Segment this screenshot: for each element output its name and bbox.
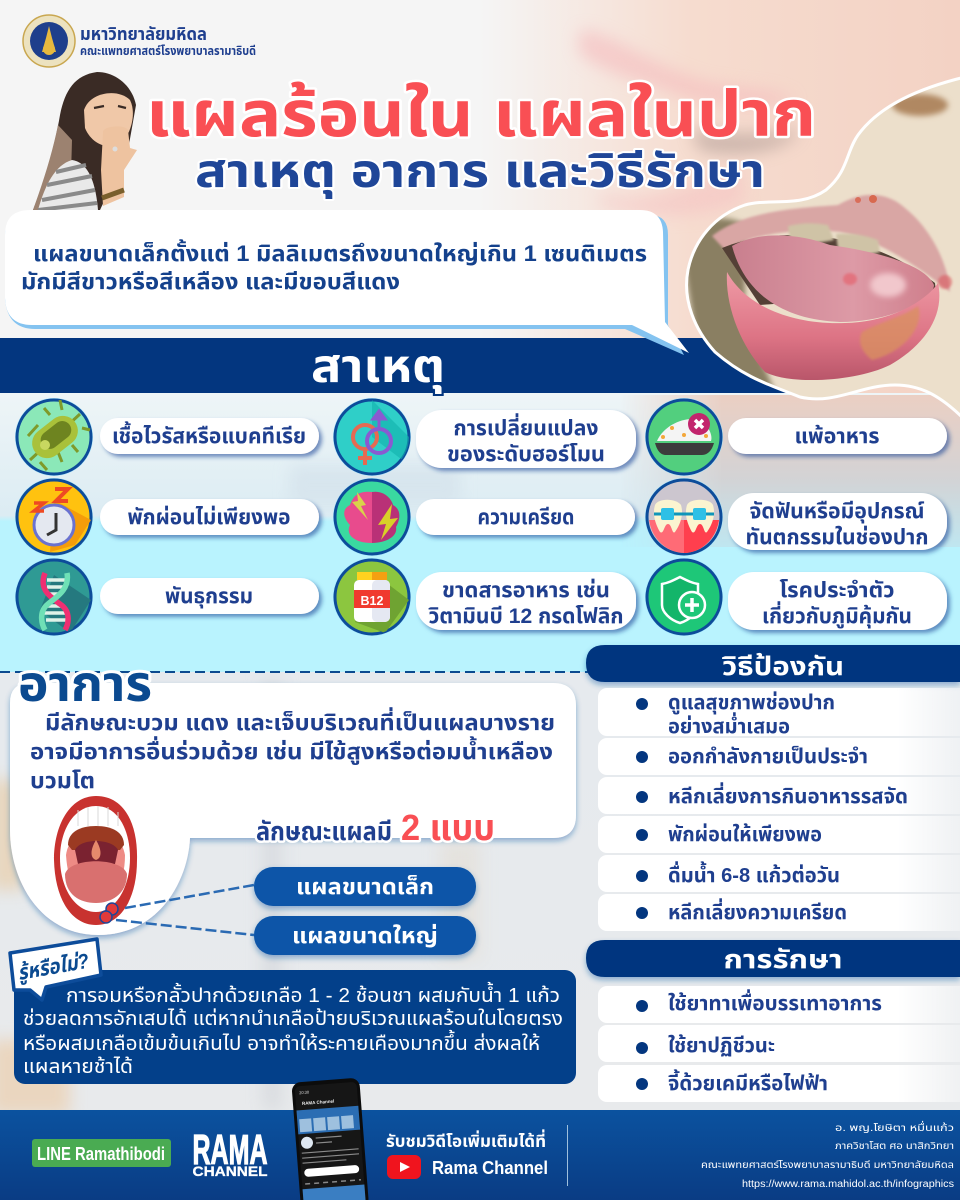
panel: symptoms bubble: อาจมีอาการอื่นร่วมด้วย เช่น มีไข้สูงหรือต่อมน้ำเหลือง	[30, 736, 553, 765]
pill	[728, 493, 947, 550]
badge: did you know label	[10, 939, 101, 1000]
item: exercise: ออกกำลังกายเป็นประจำ	[668, 745, 868, 768]
logo: RAMA Channel	[192, 1126, 268, 1179]
button: LINE Ramathibodi: LINE Ramathibodi	[37, 1144, 165, 1164]
pill: ของระดับฮอร์โมน	[447, 443, 605, 466]
item: antibiotics: ใช้ยาปฏิชีวนะ	[668, 1035, 775, 1057]
heading: treatment	[586, 940, 960, 977]
callout: ulcer description: มักมีสีขาวหรือสีเหลือง และมีขอบสีแดง	[21, 269, 400, 294]
item: topical medicine	[598, 986, 960, 1023]
photo: mouth with ulcers	[680, 70, 960, 420]
item: avoid stress	[598, 894, 960, 931]
phone mockup: RAMA Channel	[302, 1099, 334, 1106]
item: rest	[598, 816, 960, 853]
title: แผลร้อนใน แผลในปาก	[146, 78, 816, 150]
item: exercise	[598, 738, 960, 775]
pill: การเปลี่ยนแปลง	[454, 413, 598, 440]
pill	[728, 418, 947, 454]
subtitle: สาเหตุ อาการ และวิธีรักษา	[195, 145, 765, 199]
icon: YouTube	[387, 1155, 421, 1179]
pill: ทันตกรรมในช่องปาก	[746, 526, 928, 549]
pill: ขาดสารอาหาร เช่น	[442, 579, 610, 602]
cause 7: genetics	[15, 558, 319, 636]
phone mockup	[291, 1078, 369, 1200]
item: oral care	[598, 688, 960, 738]
organization name: คณะแพทยศาสตร์โรงพยาบาลรามาธิบดี	[80, 44, 256, 58]
credits: ภาควิชาโสต ศอ นาสิกวิทยา	[835, 1140, 954, 1152]
pill: เชื้อไวรัสหรือแบคทีเรีย	[112, 421, 306, 448]
badge: did you know label: รู้หรือไม่?	[16, 950, 91, 986]
list: prevention	[598, 688, 960, 931]
cause 3: food allergy	[645, 398, 947, 476]
pill: เกี่ยวกับภูมิคุ้มกัน	[762, 601, 912, 629]
pill: large ulcer	[254, 916, 476, 955]
heading: two kinds of ulcers	[256, 807, 495, 848]
cause 1: virus or bacteria	[15, 398, 319, 476]
cause 8: nutrient deficiency	[333, 558, 636, 636]
heading: two kinds of ulcers: 2 แบบ	[401, 807, 495, 848]
item: avoid stress: หลีกเลี่ยงความเครียด	[668, 898, 847, 924]
list: treatment	[598, 986, 960, 1102]
pill: โรคประจำตัว	[780, 579, 894, 602]
item: drink water: ดื่มน้ำ 6-8 แก้วต่อวัน	[668, 861, 840, 887]
panel: symptoms bubble: บวมโต	[30, 768, 95, 793]
credits: https://www.rama.mahidol.ac.th/infographics	[742, 1179, 954, 1190]
pill: จัดฟันหรือมีอุปกรณ์	[750, 500, 924, 524]
pill	[100, 418, 319, 454]
pill: small ulcer: แผลขนาดเล็ก	[296, 874, 434, 899]
background: top photo area	[0, 0, 960, 400]
item: topical medicine: ใช้ยาทาเพื่อบรรเทาอาการ	[668, 989, 882, 1015]
text: watch more videos: รับชมวิดีโอเพิ่มเติมได้ที่	[386, 1129, 546, 1151]
logo: RAMA Channel: CHANNEL	[192, 1163, 268, 1179]
heading: prevention: วิธีป้องกัน	[722, 651, 844, 681]
section band: causes heading background	[0, 338, 810, 393]
pill	[416, 572, 636, 630]
heading: symptoms: อาการ	[18, 656, 152, 712]
divider: dashed line	[0, 671, 590, 673]
panel: did you know: หรือผสมเกลือเข้มข้นเกินไป อาจทำให้ระคายเคืองมากขึ้น ส่งผลให้	[23, 1029, 540, 1055]
item: drink water	[598, 855, 960, 892]
item: antibiotics	[598, 1025, 960, 1062]
heading: treatment: การรักษา	[724, 944, 842, 974]
item: oral care: ดูแลสุขภาพช่องปาก	[668, 692, 835, 714]
pill: ความเครียด	[478, 506, 574, 529]
credits	[701, 1120, 954, 1190]
phone mockup: 20:30	[299, 1089, 310, 1095]
pill: แพ้อาหาร	[794, 425, 880, 448]
logo: RAMA Channel: RAMA	[192, 1126, 268, 1173]
pill	[728, 572, 947, 630]
organization name	[80, 24, 256, 58]
panel: did you know: ช่วยลดการอักเสบได้ แต่หากนำเกลือป้ายบริเวณแผลร้อนในโดยตรง	[23, 1007, 563, 1030]
icon: open mouth illustration	[54, 796, 254, 935]
item: oral care: อย่างสม่ำเสมอ	[668, 712, 790, 738]
cause 2: hormone change	[333, 398, 636, 476]
pill	[416, 410, 636, 468]
cause 8: nutrient deficiency: B12	[361, 594, 384, 608]
callout: ulcer description	[5, 210, 689, 355]
cause 9: immune disease	[645, 558, 947, 636]
heading: causes: สาเหตุ	[311, 340, 445, 394]
item: avoid spicy food: หลีกเลี่ยงการกินอาหารรสจัด	[668, 782, 908, 808]
pill: พันธุกรรม	[165, 585, 253, 609]
panel: did you know: แผลหายช้าได้	[23, 1055, 133, 1078]
background: causes section	[0, 393, 960, 678]
item: cautery: จี้ด้วยเคมีหรือไฟฟ้า	[668, 1069, 828, 1095]
background: lower blurred photo	[0, 652, 960, 1115]
organization name: มหาวิทยาลัยมหิดล	[80, 24, 207, 44]
woman covering mouth	[33, 72, 137, 210]
item: rest: พักผ่อนให้เพียงพอ	[668, 824, 822, 846]
pill	[100, 578, 319, 614]
footer band	[0, 1110, 960, 1200]
cause 4: lack of sleep	[15, 478, 319, 556]
pill: พักผ่อนไม่เพียงพอ	[128, 506, 290, 529]
panel: did you know	[14, 970, 576, 1084]
pill: วิตามินบี 12 กรดโฟลิก	[428, 605, 624, 628]
heading: prevention	[586, 645, 960, 682]
cause 5: stress	[333, 478, 635, 556]
pill: large ulcer: แผลขนาดใหญ่	[292, 923, 438, 948]
pill	[100, 499, 319, 535]
logo: Mahidol seal	[23, 15, 75, 67]
text: Rama Channel: Rama Channel	[432, 1158, 548, 1178]
button: LINE Ramathibodi	[32, 1139, 171, 1167]
footer divider	[566, 1125, 568, 1186]
panel: symptoms bubble: มีลักษณะบวม แดง และเจ็บบริเวณที่เป็นแผลบางราย	[45, 707, 555, 735]
cause 6: braces or dental device	[645, 478, 947, 556]
callout: ulcer description: แผลขนาดเล็กตั้งแต่ 1 มิลลิเมตรถึงขนาดใหญ่เกิน 1 เซนติเมตร	[33, 239, 647, 266]
item: avoid spicy food	[598, 777, 960, 814]
item: cautery	[598, 1065, 960, 1102]
pill: small ulcer	[254, 867, 476, 906]
credits: อ. พญ.โยษิตา หมื่นแก้ว	[835, 1120, 954, 1134]
heading: two kinds of ulcers: ลักษณะแผลมี	[256, 816, 392, 846]
pill	[416, 499, 635, 535]
credits: คณะแพทยศาสตร์โรงพยาบาลรามาธิบดี มหาวิทยาลัยมหิดล	[701, 1159, 954, 1171]
panel: symptoms bubble	[10, 683, 576, 935]
panel: did you know: การอมหรือกลั้วปากด้วยเกลือ 1 - 2 ช้อนชา ผสมกับน้ำ 1 แก้ว	[66, 981, 560, 1007]
